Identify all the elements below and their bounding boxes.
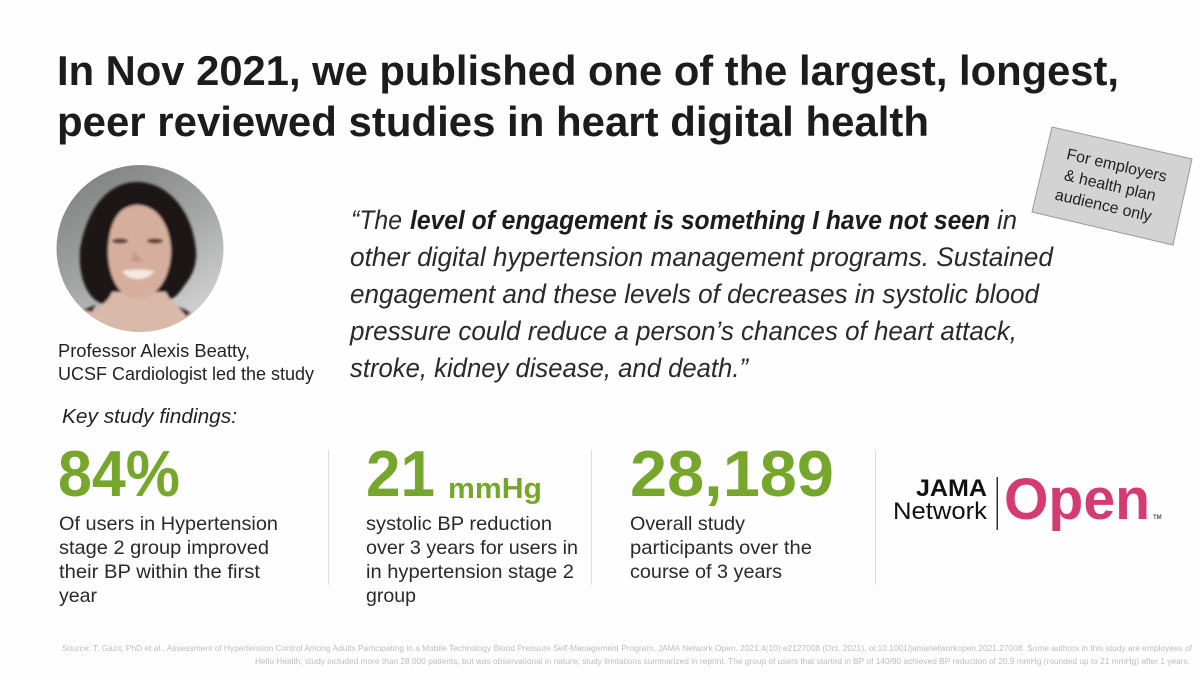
quote: other digital hypertension management programs. Sustained [350,242,1054,272]
logo: JAMA Network Open: Network [893,498,988,525]
logo: JAMA Network Open: JAMA [916,475,987,502]
stat: 21 mmHg: systolic BP reduction [366,513,552,535]
source footnote [62,644,1193,666]
photo caption: Professor Alexis Beatty, [58,341,250,361]
stat: 84%: year [59,585,98,607]
logo: JAMA Network Open: TM [1153,515,1162,521]
stat: 84%: 84% [58,437,180,510]
quote: level of engagement is something I have not seen [410,207,990,235]
stat: 28,189: course of 3 years [630,561,782,583]
logo: JAMA Network Open [893,467,1162,532]
source footnote: Source: T. Gazit, PhD et al., Assessment of Hypertension Control Among Adults Participating in a Mobile Technology Blood Pressure Self-Management Program, JAMA Network Open. 2021;4(10):e2127008 (Oct. 2021), oi:10.1001/jamanetworkopen.2021.27008. Some authors in this study are employees of [62,644,1193,653]
title: peer reviewed studies in heart digital health [57,98,929,145]
stat: 21 mmHg: in hypertension stage 2 [366,561,574,583]
stat: 84%: Of users in Hypertension [59,513,278,535]
source footnote: Hello Health; study included more than 28,000 patients, but was observational in nature; study limitations summarized in reprint. The group of users that started in BP of 140/90 achieved BP reduction of 20.9 mmHg (rounded up to 21 mmHg) after 1 years. [255,657,1190,666]
stat: 21 mmHg: 21 [366,437,435,510]
sticker: audience note [1032,127,1192,245]
stat: 28,189 [630,437,834,583]
stat: 28,189: 28,189 [630,437,834,510]
stat: 28,189: Overall study [630,513,745,535]
stat: 28,189: participants over the [630,537,812,559]
quote [349,205,1054,383]
stat: 21 mmHg: group [366,585,416,607]
title [57,47,1119,145]
stat: 84% [58,437,278,607]
stat: 21 mmHg [366,437,578,607]
title: In Nov 2021, we published one of the largest, longest, [57,47,1119,94]
stat: 21 mmHg: over 3 years for users in [366,537,578,559]
section label: Key study findings: [62,406,237,428]
stat: 21 mmHg: mmHg [448,473,542,505]
stat: 84%: their BP within the first [59,561,261,583]
photo: Professor Alexis Beatty [56,165,224,340]
quote: in [997,205,1017,235]
stat: 84%: stage 2 group improved [59,537,269,559]
sticker: audience note: For employers [1065,146,1168,186]
photo caption [58,341,314,384]
logo: JAMA Network Open: Open [1004,467,1150,532]
quote: “The [351,205,402,235]
quote: engagement and these levels of decreases in systolic blood [350,279,1040,309]
quote: stroke, kidney disease, and death.” [350,353,749,383]
sticker: audience note: & health plan [1063,167,1157,205]
photo caption: UCSF Cardiologist led the study [58,364,314,384]
sticker: audience note: audience only [1053,187,1153,225]
quote: pressure could reduce a person’s chances of heart attack, [349,316,1017,346]
